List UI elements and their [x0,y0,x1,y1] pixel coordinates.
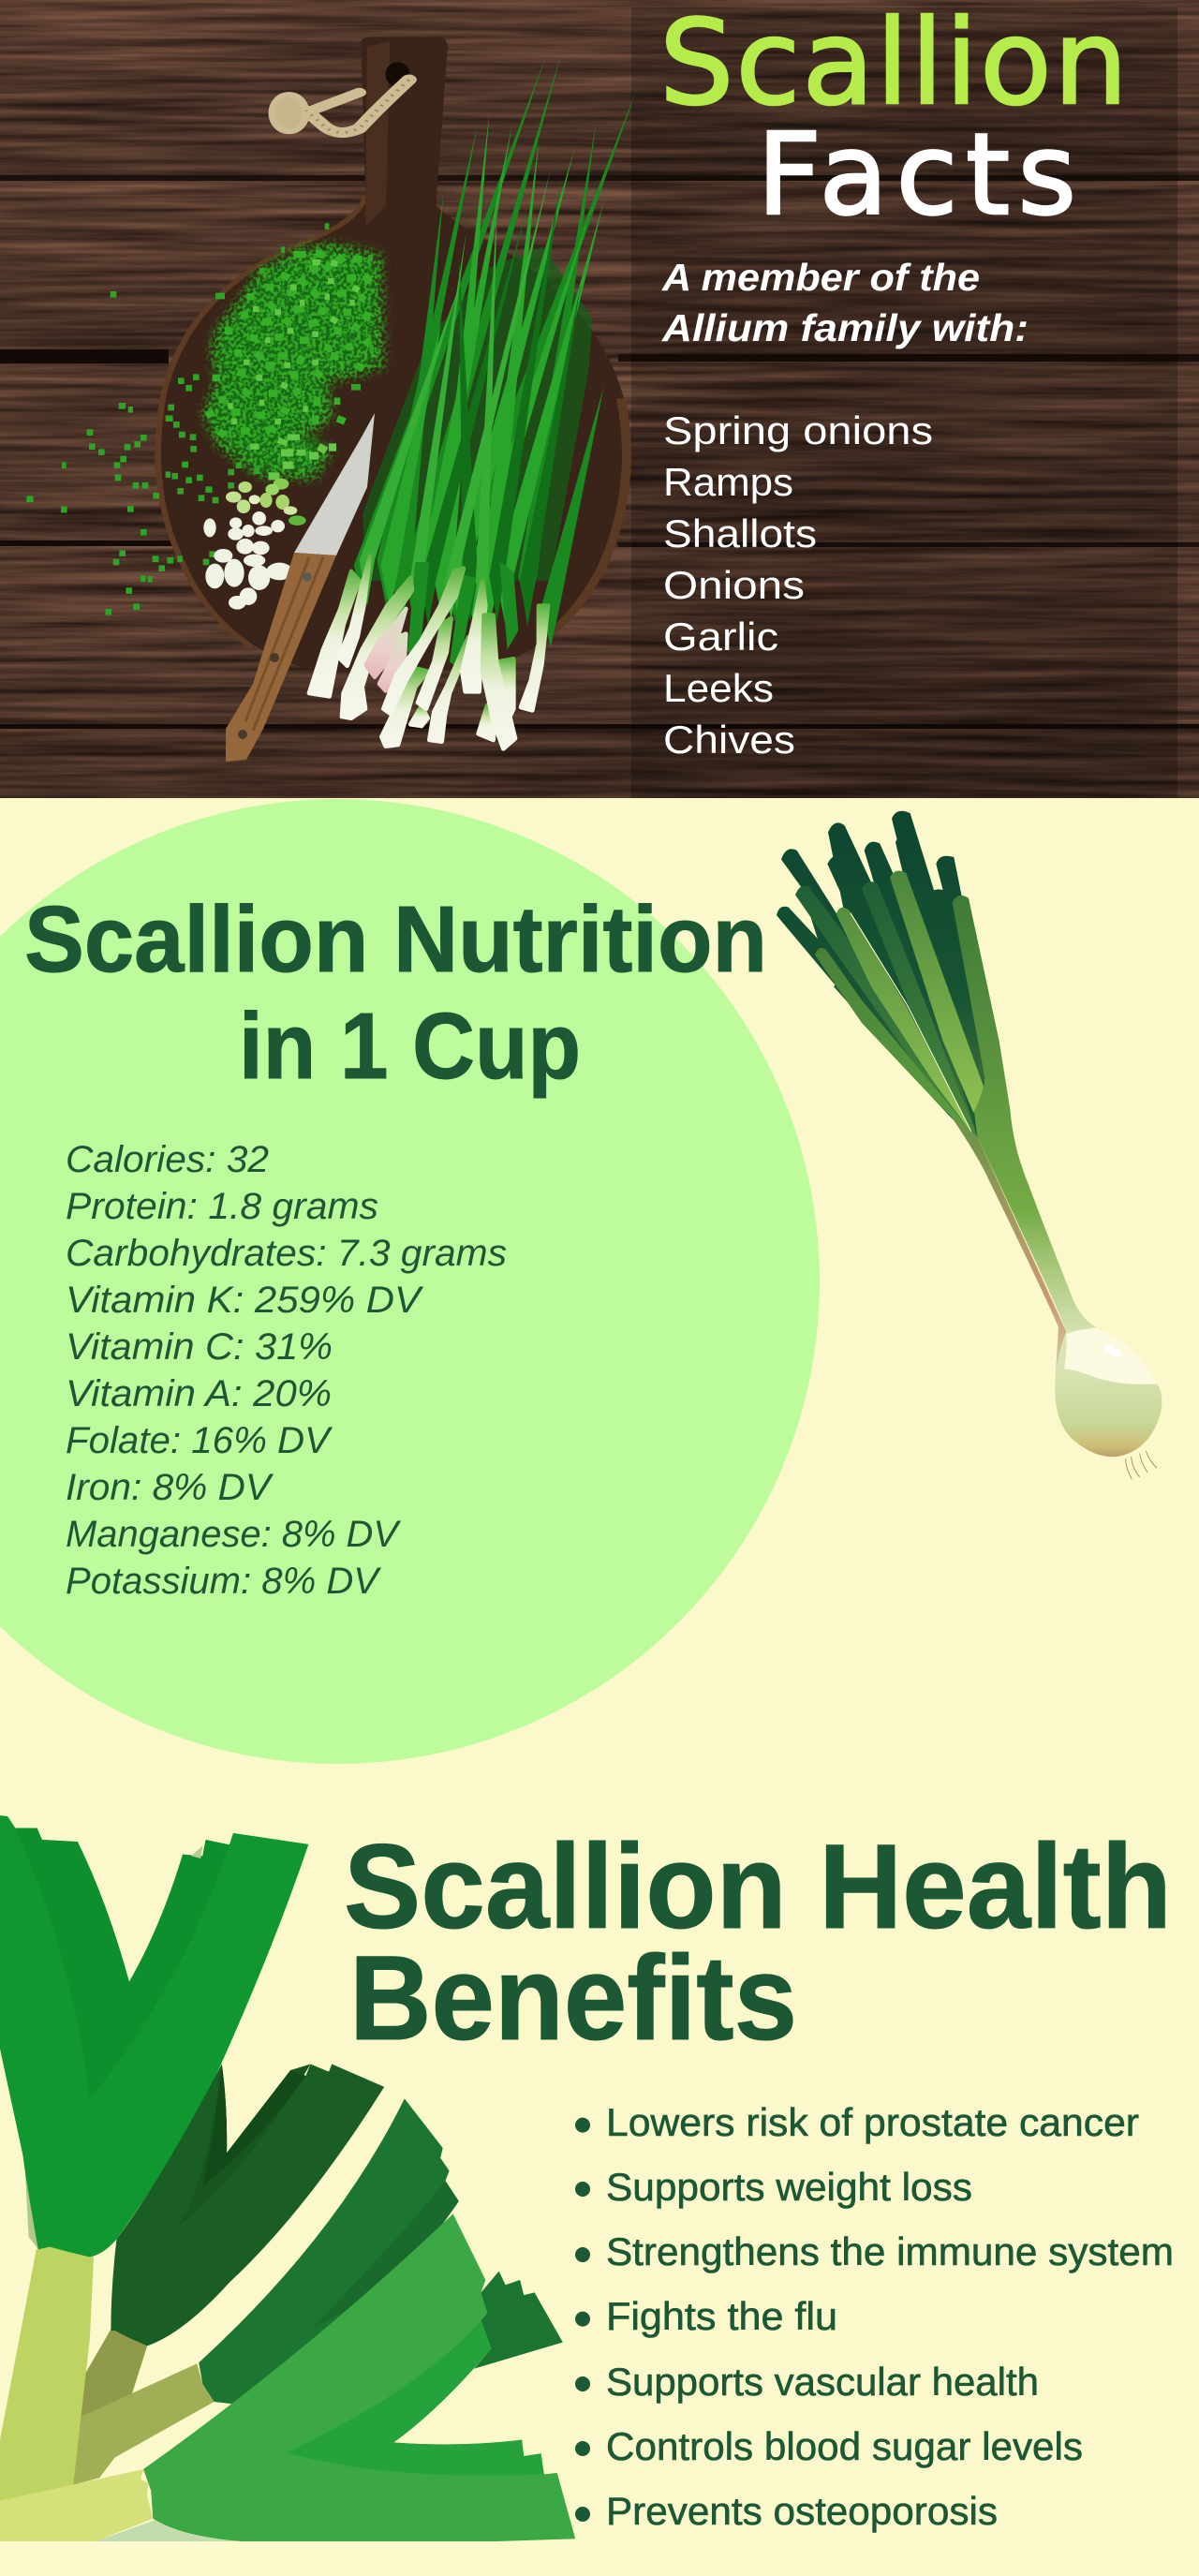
stalk and tan side [949,896,1096,1377]
photo content traced in stretched coordinates [158,37,639,674]
nutrient list: Protein: 1.8 grams [66,1186,378,1227]
panel: health benefits [344,1820,1174,2533]
nutrition heading [24,887,767,1099]
nutrient list: Iron: 8% DV [66,1467,274,1508]
scallion white bulbs [309,555,548,748]
translucent text panel [631,7,1177,798]
health benefits heading: Benefits [349,1932,797,2065]
list of allium relatives: Garlic [663,614,778,659]
health benefits heading [344,1820,1172,2065]
list of allium relatives [663,408,933,762]
nutrient list: Folate: 16% DV [66,1420,333,1461]
list of allium relatives: Shallots [663,511,817,555]
health benefits heading: Scallion Health [344,1820,1172,1954]
benefits list: Prevents osteoporosis [606,2489,998,2533]
green pile [201,242,386,481]
nutrient list: Potassium: 8% DV [66,1561,381,1602]
panel: nutrition circle [0,799,820,1764]
stalk pieces [0,2247,215,2501]
rope knot [273,80,409,133]
top bright leek [0,1815,308,2257]
benefits list: Controls blood sugar levels [606,2424,1083,2468]
subheading [661,256,1029,349]
nutrient list: Vitamin K: 259% DV [66,1280,423,1321]
benefits list [606,2100,1174,2533]
panel: hero photo of scallions on a wooden board [0,0,1199,798]
benefits list: Supports vascular health [606,2360,1039,2404]
benefits list: Fights the flu [606,2294,837,2338]
leaf filler behind the fan [834,914,985,1146]
title [659,0,1128,241]
chopped white pieces [203,479,306,610]
nutrient list: Carbohydrates: 7.3 grams [66,1233,507,1274]
nutrient list: Vitamin A: 20% [66,1373,332,1414]
nutrition heading: in 1 Cup [239,994,581,1099]
pale leaves [815,871,984,1146]
dark leek [111,2065,384,2346]
cutting board [158,37,629,674]
illustration: fan of cut scallions [0,1815,575,2541]
benefits list: Lowers risk of prostate cancer [606,2100,1139,2144]
benefits list: Strengthens the immune system [606,2229,1174,2273]
nutrient list: Vitamin C: 31% [66,1326,333,1368]
title: Facts [757,111,1076,241]
nutrient list [66,1139,507,1602]
back dark leaves [777,811,985,1136]
bullet dots [575,2118,590,2522]
nutrient list: Manganese: 8% DV [66,1514,401,1555]
right end of green leek [474,2272,563,2369]
chopped scallions on the board [26,227,386,612]
scallion bunch [354,52,639,647]
light green circle [0,799,820,1764]
light green leek [143,2213,575,2541]
nutrient list: Calories: 32 [66,1139,269,1180]
pale shadow under top leaf [25,2166,38,2249]
knife [226,413,375,762]
scattered chopped pieces [26,227,374,612]
list of allium relatives: Leeks [663,666,774,710]
list of allium relatives: Ramps [663,460,793,504]
roots [1126,1451,1157,1479]
bulb [1055,1329,1162,1457]
wood plank background [0,0,1199,798]
list of allium relatives: Chives [663,718,795,762]
extra stalk greens [407,562,518,668]
list of allium relatives: Spring onions [663,408,933,452]
middle green leaves [795,881,981,1146]
list of allium relatives: Onions [663,563,805,607]
middle green leek [199,2098,459,2405]
subheading: Allium family with: [661,306,1029,349]
white bases [309,555,548,748]
nutrition heading: Scallion Nutrition [24,887,767,992]
subheading: A member of the [661,256,980,299]
illustration: whole scallion [777,811,1162,1479]
bottom pale stalk [0,2469,241,2541]
benefits list: Supports weight loss [606,2165,972,2209]
